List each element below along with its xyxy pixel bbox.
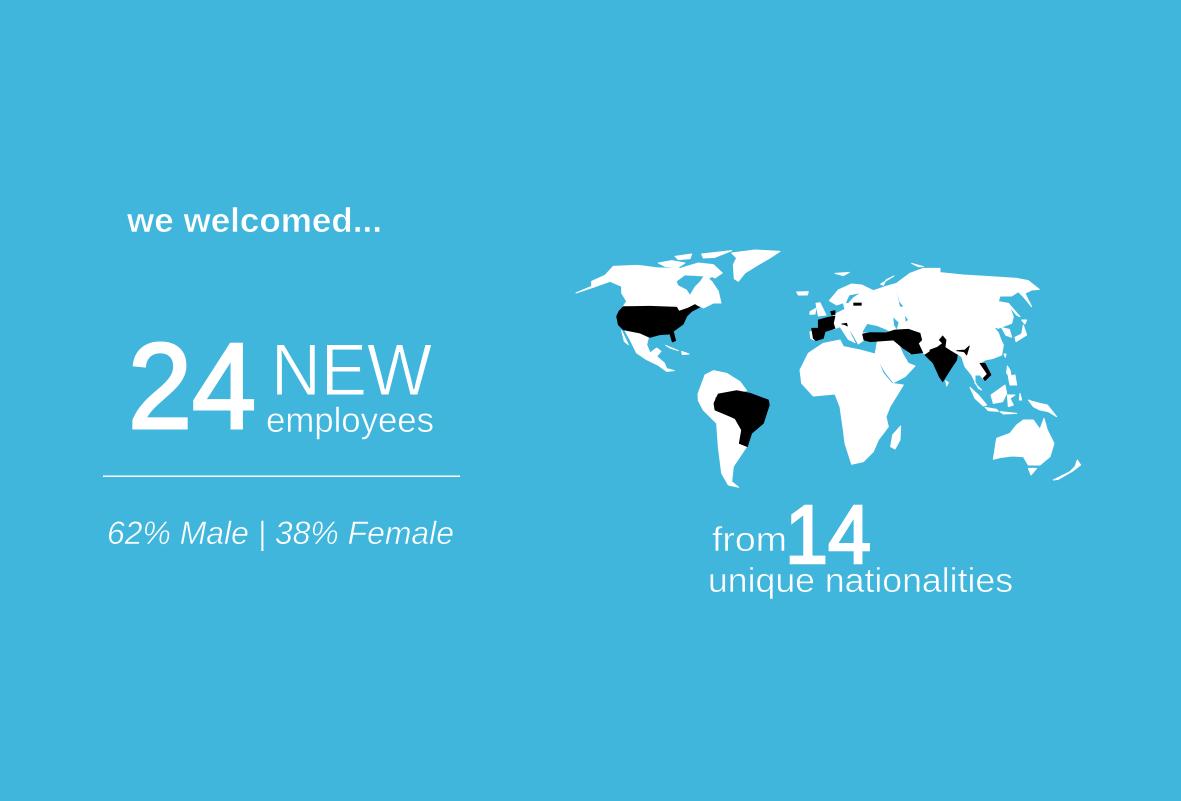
Madagascar — [891, 426, 901, 449]
New Zealand — [1053, 460, 1081, 480]
South America landmass — [698, 371, 747, 487]
Arctic island — [912, 263, 923, 267]
Tasmania — [1028, 468, 1037, 475]
Taiwan — [1004, 354, 1006, 357]
heading: we welcomed: we welcomed... — [126, 202, 382, 240]
world map — [576, 250, 1081, 487]
Indonesia islands — [970, 372, 1022, 414]
panel: new employees — [103, 202, 460, 551]
Iceland — [797, 292, 808, 295]
Arctic islands — [658, 251, 732, 278]
map: North America — [576, 250, 780, 371]
Japan — [1015, 320, 1027, 342]
gender split: 62% Male | 38% Female — [107, 515, 454, 551]
Africa landmass — [800, 340, 903, 464]
highlighted: Turkey, Iran, Afghanistan — [863, 329, 923, 354]
Black Sea — [863, 324, 890, 333]
Sri Lanka — [946, 381, 948, 386]
Canada landmass — [576, 265, 721, 311]
map: Western Eurasia — [797, 263, 940, 383]
Mexico and Central America — [622, 331, 674, 371]
Caribbean islands — [666, 345, 689, 355]
Philippines — [1007, 366, 1017, 385]
UK and Ireland — [810, 303, 826, 316]
Sakhalin — [1008, 303, 1020, 317]
label: employees: employees — [266, 401, 434, 440]
highlighted: United States — [617, 305, 699, 342]
Korea — [1002, 328, 1012, 337]
Portugal — [810, 332, 814, 340]
Caspian and Aral seas — [893, 291, 908, 329]
label: unique nationalities: unique nationalities — [708, 562, 1013, 600]
highlighted: Pakistan border area — [925, 349, 940, 375]
highlighted: Belgium — [831, 311, 835, 315]
highlighted: Spain and France — [812, 316, 835, 341]
number: 14: 14 — [785, 488, 871, 581]
highlighted: Poland fragment — [853, 303, 862, 306]
Novaya Zemlya — [881, 276, 894, 285]
highlighted: India — [930, 336, 969, 382]
panel: nationalities — [708, 488, 1013, 600]
number: 24: 24 — [128, 318, 256, 454]
New Guinea — [1028, 400, 1057, 417]
map: South America — [698, 371, 769, 487]
label: NEW: NEW — [271, 330, 432, 411]
Hudson Bay — [677, 275, 703, 295]
map: Eastern Asia — [930, 268, 1039, 390]
divider line — [103, 476, 460, 477]
map: Oceania — [970, 372, 1081, 480]
highlighted: Brazil — [714, 391, 769, 447]
highlighted: Croatia fragment — [842, 323, 847, 326]
Europe and West Asia landmass — [829, 268, 940, 360]
Svalbard — [835, 272, 849, 276]
highlighted: Vietnam — [980, 363, 991, 381]
East Asia landmass — [930, 268, 1039, 390]
Baltic Sea — [846, 293, 859, 303]
Australia — [993, 418, 1054, 465]
Greenland — [732, 250, 780, 281]
map: Africa — [800, 340, 903, 464]
label: from: from — [712, 521, 787, 559]
Arabian Peninsula — [875, 340, 915, 383]
